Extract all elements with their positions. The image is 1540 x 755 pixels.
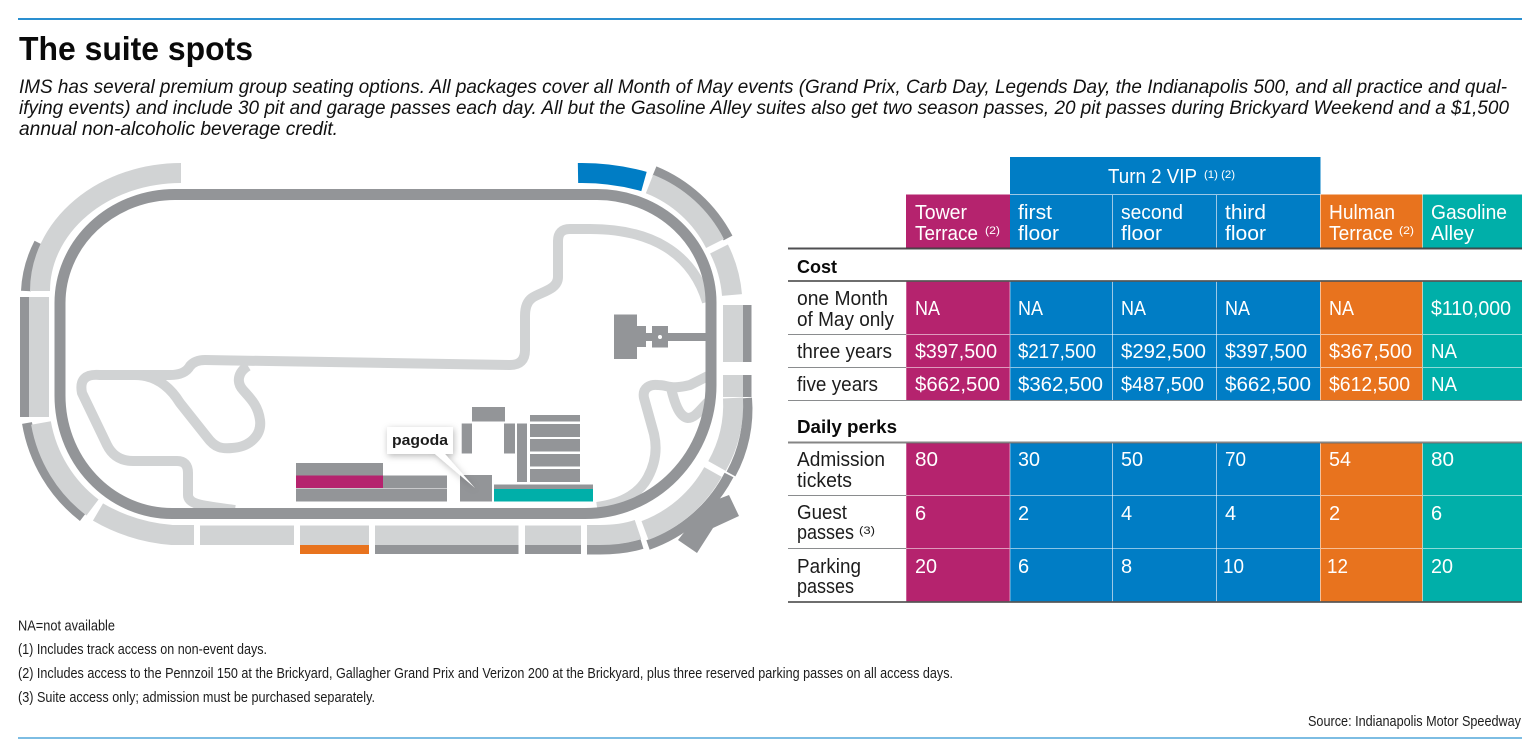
row: Guest passes: (3) — [859, 525, 875, 537]
header: third floor: third — [1225, 202, 1266, 224]
intro text block: IMS has several premium group seating options. All packages cover all Month of May events (Grand Prix, Carb Day, Legends Day, the Indianapolis 500, and all practice and qual- — [19, 76, 1507, 98]
column: Hulman Terrace — [1320, 194, 1422, 602]
footnotes — [18, 618, 953, 706]
row: Guest passes: 2 — [1018, 503, 1029, 525]
header: Gasoline Alley — [1431, 202, 1507, 245]
Turn 2 VIP stand — [578, 173, 644, 182]
header: Hulman Terrace: Hulman — [1329, 202, 1395, 224]
row: one Month of May only: NA — [915, 298, 941, 320]
row: three years: $397,500 — [915, 341, 997, 363]
footnotes: (1) Includes track access on non-event days. — [18, 641, 267, 658]
intro text block — [19, 76, 1509, 140]
header: third floor — [1225, 202, 1266, 245]
header: Hulman Terrace: Terrace — [1329, 223, 1393, 245]
header: first floor — [1018, 202, 1059, 245]
header: second floor — [1121, 202, 1183, 245]
row: three years: NA — [1431, 341, 1458, 363]
row: three years: three years — [797, 341, 892, 363]
row: five years: $662,500 — [1225, 374, 1311, 396]
header: Turn 2 VIP: (1) (2) — [1204, 169, 1235, 181]
title: The suite spots — [19, 30, 253, 67]
row: one Month of May only: NA — [1018, 298, 1044, 320]
garage structure — [678, 495, 739, 553]
row: one Month of May only: NA — [1329, 298, 1355, 320]
row: three years: $397,500 — [1225, 341, 1307, 363]
track map — [20, 171, 752, 554]
header: Tower Terrace: Tower — [915, 202, 967, 224]
row: Parking passes: 8 — [1121, 556, 1132, 578]
row: Guest passes: 4 — [1121, 503, 1132, 525]
oval track — [60, 194, 711, 514]
row: Guest passes: passes — [797, 522, 854, 544]
column: Turn 2 VIP — [1010, 157, 1320, 602]
row: Parking passes: 10 — [1223, 556, 1244, 578]
row: five years: $662,500 — [915, 374, 1000, 396]
header: Gasoline Alley: Alley — [1431, 223, 1474, 245]
row: Guest passes: Guest — [797, 502, 847, 524]
grandstands — [20, 171, 752, 554]
row: three years — [797, 341, 1458, 363]
header: Tower Terrace: Terrace — [915, 223, 978, 245]
row: one Month of May only — [797, 288, 1511, 331]
row: Admission tickets: tickets — [797, 470, 852, 492]
callout: pagoda — [387, 427, 475, 488]
row: one Month of May only: one Month — [797, 288, 888, 310]
row: Admission tickets: 80 — [915, 449, 938, 471]
row: Parking passes: 12 — [1327, 556, 1348, 578]
intro text block: ifying events) and include 30 pit and garage passes each day. All but the Gasoline Alley suites also get two season passes, 20 pit passes during Brickyard Weekend and a $1,500 — [19, 97, 1509, 119]
footnotes: NA=not available — [18, 618, 115, 634]
row: five years: five years — [797, 374, 878, 396]
section heading: Cost: Cost — [797, 257, 837, 277]
infield road course — [81, 229, 708, 510]
row: Admission tickets: 54 — [1329, 449, 1351, 471]
row: Parking passes: Parking — [797, 556, 861, 578]
header: Tower Terrace: (2) — [985, 225, 1000, 237]
footnotes: (3) Suite access only; admission must be purchased separately. — [18, 689, 375, 706]
header: Gasoline Alley: Gasoline — [1431, 202, 1507, 224]
header: first floor: first — [1018, 202, 1052, 224]
row: Guest passes — [797, 502, 1442, 544]
row: Admission tickets: Admission — [797, 449, 885, 471]
header: Hulman Terrace: (2) — [1399, 225, 1414, 237]
Tower Terrace and pit buildings — [296, 463, 447, 502]
row: Parking passes: 20 — [1431, 556, 1453, 578]
row: Parking passes: 20 — [915, 556, 937, 578]
footnotes: (2) Includes access to the Pennzoil 150 at the Brickyard, Gallagher Grand Prix and Verizon 200 at the Brickyard, plus three reserved parking passes on all access days. — [18, 665, 953, 682]
Gasoline Alley building — [494, 484, 593, 502]
row: Admission tickets: 70 — [1225, 449, 1246, 471]
row: Admission tickets — [797, 449, 1454, 492]
header: first floor: floor — [1018, 223, 1059, 245]
intro text block: annual non-alcoholic beverage credit. — [19, 118, 338, 140]
header: Hulman Terrace — [1329, 202, 1414, 245]
row: three years: $217,500 — [1018, 341, 1096, 363]
column: Tower Terrace — [906, 194, 1010, 602]
row: Parking passes — [797, 556, 1453, 598]
row: five years — [797, 374, 1458, 396]
row: one Month of May only: NA — [1121, 298, 1147, 320]
table — [788, 157, 1522, 603]
pagoda building — [460, 475, 492, 502]
row: Guest passes: 6 — [1431, 503, 1442, 525]
row: Admission tickets: 80 — [1431, 449, 1454, 471]
header: second floor: floor — [1121, 223, 1162, 245]
header: second floor: second — [1121, 202, 1183, 224]
row: Guest passes: 6 — [915, 503, 926, 525]
header: Tower Terrace — [915, 202, 1000, 245]
row: Guest passes: 2 — [1329, 503, 1340, 525]
row: three years: $367,500 — [1329, 341, 1412, 363]
row: five years: NA — [1431, 374, 1458, 396]
row: five years: $362,500 — [1018, 374, 1103, 396]
row: Admission tickets: 50 — [1121, 449, 1143, 471]
row: one Month of May only: $110,000 — [1431, 298, 1511, 320]
row: Parking passes: passes — [797, 576, 854, 598]
row: Admission tickets: 30 — [1018, 449, 1040, 471]
row: one Month of May only: of May only — [797, 309, 894, 331]
row: three years: $292,500 — [1121, 341, 1206, 363]
header: third floor: floor — [1225, 223, 1266, 245]
column: Gasoline Alley — [1422, 194, 1522, 602]
row: five years: $612,500 — [1329, 374, 1410, 396]
garage blocks — [462, 407, 580, 482]
museum and connector — [614, 314, 706, 359]
row: Parking passes: 6 — [1018, 556, 1029, 578]
section heading: Daily perks: Daily perks — [797, 417, 897, 437]
Hulman Terrace stand — [300, 545, 369, 554]
header: Turn 2 VIP: Turn 2 VIP — [1108, 166, 1197, 188]
row: one Month of May only: NA — [1225, 298, 1251, 320]
callout: pagoda: pagoda — [392, 432, 449, 449]
row: five years: $487,500 — [1121, 374, 1204, 396]
row: Guest passes: 4 — [1225, 503, 1236, 525]
